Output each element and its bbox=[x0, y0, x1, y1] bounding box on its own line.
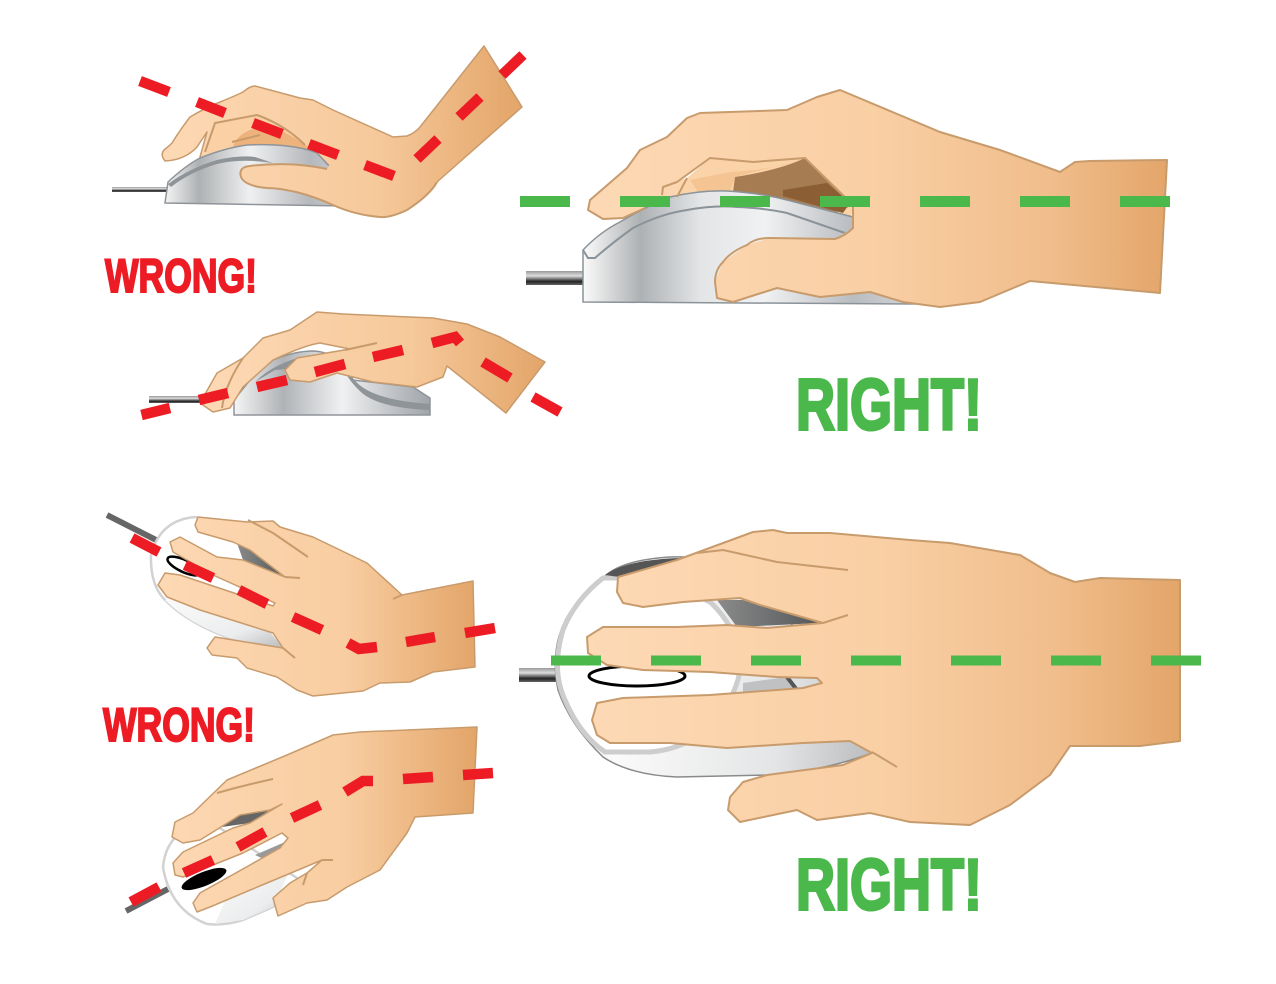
hand outline and palm over mouse bbox=[715, 170, 1030, 307]
panel: right side view, neutral wrist bbox=[520, 90, 1170, 307]
mouse body bbox=[234, 351, 430, 415]
mouse body bbox=[163, 825, 300, 924]
mouse body bbox=[165, 145, 345, 206]
mouse body bbox=[555, 557, 880, 777]
panel: wrong top view, bent outward bbox=[107, 515, 495, 696]
wrong posture line bbox=[140, 55, 523, 176]
wrong posture line bbox=[142, 337, 560, 415]
right posture line bbox=[551, 656, 1202, 666]
right posture line bbox=[520, 196, 1170, 207]
panel: wrong top view, bent inward bbox=[126, 727, 493, 924]
heading: wrong top: WRONG! bbox=[105, 249, 257, 302]
wrong posture line bbox=[131, 773, 493, 902]
panel: wrong side view, wrist bent downward bbox=[142, 312, 560, 415]
wrong posture line bbox=[132, 538, 495, 649]
panel: wrong side view, wrist bent upward bbox=[112, 46, 523, 217]
thumb and palm bbox=[240, 135, 437, 217]
heading: right bottom: RIGHT! bbox=[796, 846, 982, 926]
heading: wrong bottom: WRONG! bbox=[103, 698, 255, 751]
mouse body bbox=[151, 517, 300, 648]
panel: right top view, neutral wrist bbox=[519, 530, 1202, 825]
heading: right top: RIGHT! bbox=[796, 366, 982, 446]
mouse body bbox=[583, 191, 920, 304]
